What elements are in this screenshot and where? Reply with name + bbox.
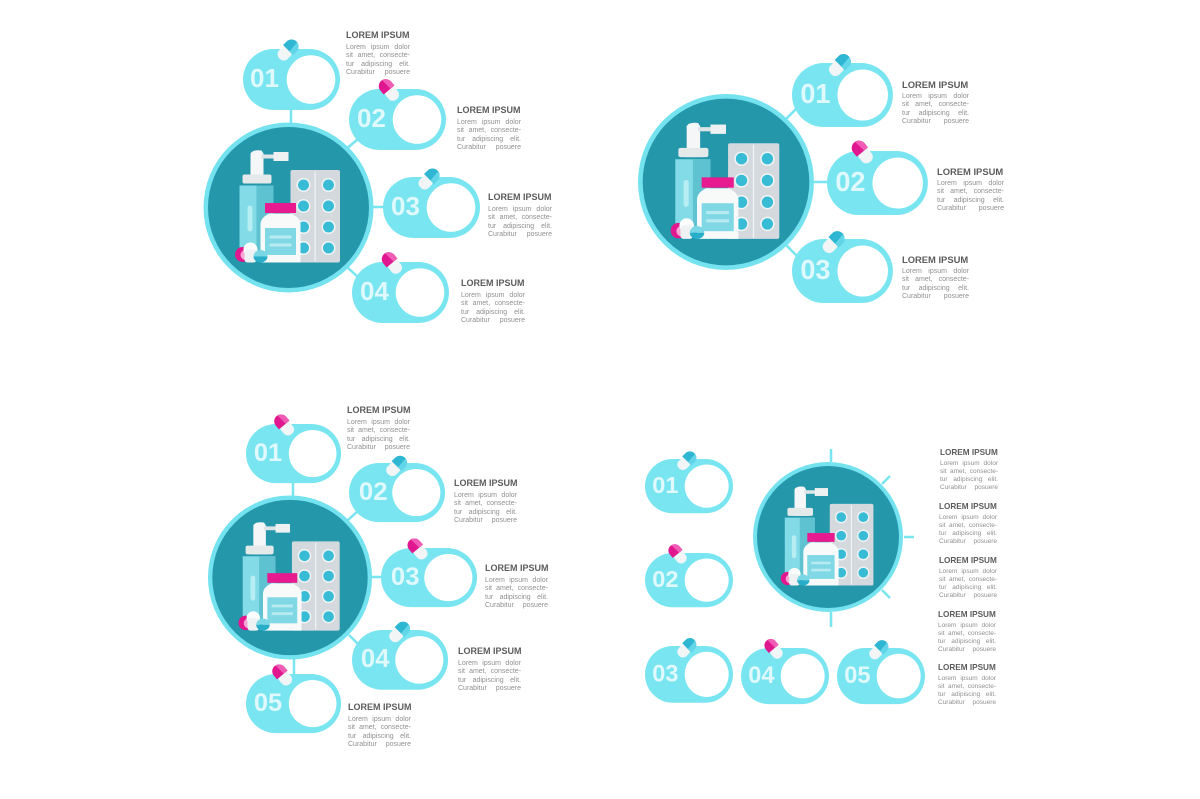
- step 02, infographic 4: 02: [652, 566, 678, 592]
- text block: infographic 4, step 4: Lorem ipsum dolor: [938, 622, 996, 629]
- text block: infographic 2, step 3: LOREM IPSUM: [902, 254, 968, 265]
- text block: infographic 3, step 5: LOREM IPSUM: [348, 702, 412, 712]
- text block: infographic 1, step 4: Curabitur posuere: [461, 317, 525, 324]
- text block: infographic 3, step 4: tur adipiscing elit.: [458, 677, 521, 684]
- text block: infographic 1, step 2: Curabitur posuere: [457, 144, 521, 151]
- text block: infographic 1, step 3: LOREM IPSUM: [488, 192, 552, 202]
- icon: medicine group, infographic 4: [753, 462, 903, 612]
- step 01, infographic 3: [246, 412, 341, 483]
- text block: infographic 3, step 3: tur adipiscing elit.: [485, 594, 548, 601]
- text block: infographic 3, step 4: Lorem ipsum dolor: [458, 660, 521, 667]
- text block: infographic 3, step 1: LOREM IPSUM: [347, 405, 411, 415]
- step 03, infographic 4: 03: [652, 660, 678, 687]
- text block: infographic 2, step 2: [937, 166, 1004, 212]
- text block: infographic 4, step 5: sit amet, consecte-: [938, 683, 996, 690]
- text block: infographic 4, step 5: tur adipiscing elit.: [938, 691, 996, 698]
- text block: infographic 3, step 1: sit amet, consecte-: [347, 427, 410, 434]
- text block: infographic 1, step 4: LOREM IPSUM: [461, 278, 525, 288]
- text block: infographic 4, step 2: tur adipiscing elit.: [939, 530, 997, 537]
- step 01, infographic 2: 01: [800, 78, 830, 109]
- text block: infographic 3, step 5: Curabitur posuere: [348, 741, 411, 748]
- text block: infographic 4, step 1: tur adipiscing elit.: [940, 476, 998, 483]
- text block: infographic 4, step 3: Lorem ipsum dolor: [939, 568, 997, 575]
- text block: infographic 4, step 2: [939, 502, 997, 545]
- step 03, infographic 3: 03: [391, 563, 420, 591]
- step 01, infographic 1: [243, 37, 340, 110]
- text block: infographic 3, step 1: [347, 405, 411, 451]
- text block: infographic 2, step 3: Lorem ipsum dolor: [902, 268, 969, 275]
- text block: infographic 4, step 2: sit amet, consecte-: [939, 522, 997, 529]
- text block: infographic 2, step 2: LOREM IPSUM: [937, 166, 1003, 177]
- step 03, infographic 3: [381, 536, 477, 607]
- text block: infographic 2, step 3: sit amet, consecte-: [902, 276, 969, 283]
- text block: infographic 4, step 5: Lorem ipsum dolor: [938, 675, 996, 682]
- text block: infographic 1, step 3: Lorem ipsum dolor: [488, 206, 552, 213]
- text block: infographic 1, step 4: Lorem ipsum dolor: [461, 292, 525, 299]
- step 02, infographic 3: 02: [359, 478, 388, 506]
- connectors: infographic 2: [785, 107, 829, 257]
- text block: infographic 2, step 1: LOREM IPSUM: [902, 79, 968, 90]
- text block: infographic 4, step 4: tur adipiscing elit.: [938, 638, 996, 645]
- text block: infographic 4, step 1: LOREM IPSUM: [940, 448, 998, 457]
- text block: infographic 1, step 1: sit amet, consecte-: [346, 52, 410, 59]
- text block: infographic 2, step 3: Curabitur posuere: [902, 293, 969, 300]
- text block: infographic 3, step 3: Lorem ipsum dolor: [485, 577, 548, 584]
- text block: infographic 2, step 2: tur adipiscing elit.: [937, 197, 1004, 204]
- text block: infographic 4, step 1: [940, 448, 998, 491]
- step 05, infographic 3: 05: [254, 689, 282, 717]
- text block: infographic 3, step 2: Lorem ipsum dolor: [454, 492, 517, 499]
- step 02, infographic 3: [349, 453, 445, 522]
- step 02, infographic 2: 02: [835, 166, 865, 197]
- step 05, infographic 4: [837, 637, 925, 704]
- text block: infographic 4, step 1: Curabitur posuere: [940, 484, 998, 491]
- text block: infographic 3, step 5: Lorem ipsum dolor: [348, 716, 411, 723]
- text block: infographic 1, step 2: LOREM IPSUM: [457, 105, 521, 115]
- step 02, infographic 1: [349, 76, 446, 150]
- text block: infographic 1, step 2: [457, 105, 521, 151]
- text block: infographic 4, step 2: Curabitur posuere: [939, 538, 997, 545]
- text block: infographic 3, step 2: [454, 478, 518, 524]
- text block: infographic 3, step 4: sit amet, consecte-: [458, 668, 521, 675]
- step 03, infographic 2: [792, 228, 893, 303]
- text block: infographic 2, step 1: Curabitur posuere: [902, 118, 969, 125]
- text block: infographic 3, step 2: tur adipiscing elit.: [454, 509, 517, 516]
- text block: infographic 2, step 1: tur adipiscing elit.: [902, 110, 969, 117]
- text block: infographic 2, step 1: sit amet, consecte-: [902, 101, 969, 108]
- step 05, infographic 4: 05: [844, 662, 870, 689]
- text block: infographic 1, step 1: Curabitur posuere: [346, 69, 410, 76]
- text block: infographic 3, step 5: tur adipiscing elit.: [348, 733, 411, 740]
- text block: infographic 3, step 1: Lorem ipsum dolor: [347, 419, 410, 426]
- text block: infographic 4, step 3: Curabitur posuere: [939, 592, 997, 599]
- text block: infographic 4, step 1: Lorem ipsum dolor: [940, 460, 998, 467]
- text block: infographic 2, step 2: sit amet, consecte-: [937, 188, 1004, 195]
- text block: infographic 3, step 5: sit amet, consecte-: [348, 724, 411, 731]
- step 01, infographic 4: 01: [652, 472, 678, 498]
- text block: infographic 1, step 3: [488, 192, 552, 238]
- text block: infographic 3, step 3: [485, 563, 549, 609]
- text block: infographic 1, step 4: tur adipiscing elit.: [461, 309, 525, 316]
- step 03, infographic 1: [383, 166, 480, 238]
- step 04, infographic 1: 04: [360, 276, 389, 306]
- step 03, infographic 1: 03: [391, 191, 420, 221]
- text block: infographic 3, step 4: Curabitur posuere: [458, 685, 521, 692]
- step 02, infographic 4: [645, 542, 733, 607]
- text block: infographic 4, step 5: LOREM IPSUM: [938, 663, 996, 672]
- text block: infographic 4, step 4: sit amet, consecte-: [938, 630, 996, 637]
- step 04, infographic 1: [352, 249, 449, 323]
- text block: infographic 4, step 3: LOREM IPSUM: [939, 556, 997, 565]
- text block: infographic 1, step 1: Lorem ipsum dolor: [346, 44, 410, 51]
- text block: infographic 2, step 2: Lorem ipsum dolor: [937, 180, 1004, 187]
- text block: infographic 2, step 2: Curabitur posuere: [937, 205, 1004, 212]
- text block: infographic 4, step 5: Curabitur posuere: [938, 699, 996, 706]
- icon: medicine group, infographic 3: [208, 495, 372, 660]
- connectors: infographic 3: [293, 482, 384, 675]
- icon: medicine group, infographic 1: [204, 122, 374, 292]
- text block: infographic 3, step 2: LOREM IPSUM: [454, 478, 518, 488]
- text block: infographic 4, step 2: LOREM IPSUM: [939, 502, 997, 511]
- text block: infographic 2, step 3: tur adipiscing elit.: [902, 285, 969, 292]
- text block: infographic 1, step 2: sit amet, consecte-: [457, 127, 521, 134]
- step 01, infographic 3: 01: [254, 439, 282, 467]
- step 04, infographic 3: [352, 619, 448, 690]
- step 01, infographic 2: [792, 51, 893, 127]
- text block: infographic 4, step 5: [938, 663, 996, 706]
- text block: infographic 2, step 3: [902, 254, 969, 300]
- text block: infographic 1, step 2: Lorem ipsum dolor: [457, 119, 521, 126]
- text block: infographic 1, step 1: LOREM IPSUM: [346, 30, 410, 40]
- step 04, infographic 4: 04: [748, 662, 775, 689]
- text block: infographic 3, step 3: Curabitur posuere: [485, 602, 548, 609]
- text block: infographic 4, step 1: sit amet, consecte-: [940, 468, 998, 475]
- text block: infographic 1, step 3: Curabitur posuere: [488, 231, 552, 238]
- icon: medicine group, infographic 2: [638, 94, 814, 270]
- text block: infographic 3, step 3: LOREM IPSUM: [485, 563, 549, 573]
- text block: infographic 4, step 4: LOREM IPSUM: [938, 610, 996, 619]
- text block: infographic 3, step 4: LOREM IPSUM: [458, 646, 522, 656]
- text block: infographic 4, step 3: tur adipiscing elit.: [939, 584, 997, 591]
- step 02, infographic 1: 02: [357, 103, 386, 133]
- text block: infographic 4, step 3: [939, 556, 997, 599]
- step 02, infographic 2: [827, 138, 928, 215]
- text block: infographic 4, step 3: sit amet, consecte-: [939, 576, 997, 583]
- text block: infographic 3, step 1: Curabitur posuere: [347, 444, 410, 451]
- step 04, infographic 3: 04: [361, 645, 390, 673]
- step 03, infographic 4: [645, 635, 733, 703]
- text block: infographic 2, step 1: Lorem ipsum dolor: [902, 93, 969, 100]
- text block: infographic 3, step 5: [348, 702, 412, 748]
- step 01, infographic 4: [645, 449, 733, 513]
- text block: infographic 3, step 3: sit amet, consecte-: [485, 585, 548, 592]
- text block: infographic 1, step 2: tur adipiscing elit.: [457, 136, 521, 143]
- step 05, infographic 3: [246, 662, 341, 733]
- text block: infographic 2, step 1: [902, 79, 969, 125]
- spokes: infographic 4: [831, 449, 914, 627]
- text block: infographic 1, step 1: tur adipiscing elit.: [346, 61, 410, 68]
- text block: infographic 4, step 4: Curabitur posuere: [938, 646, 996, 653]
- text block: infographic 3, step 2: sit amet, consecte-: [454, 500, 517, 507]
- step 04, infographic 4: [741, 636, 829, 704]
- text block: infographic 1, step 3: sit amet, consecte-: [488, 214, 552, 221]
- text block: infographic 4, step 2: Lorem ipsum dolor: [939, 514, 997, 521]
- step 03, infographic 2: 03: [800, 254, 830, 285]
- text block: infographic 3, step 1: tur adipiscing elit.: [347, 436, 410, 443]
- text block: infographic 1, step 3: tur adipiscing elit.: [488, 223, 552, 230]
- step 01, infographic 1: 01: [250, 63, 279, 93]
- text block: infographic 4, step 4: [938, 610, 996, 653]
- text block: infographic 1, step 4: [461, 278, 525, 324]
- text block: infographic 1, step 4: sit amet, consecte-: [461, 300, 525, 307]
- text block: infographic 3, step 4: [458, 646, 522, 692]
- connectors: infographic 1: [291, 109, 385, 277]
- text block: infographic 3, step 2: Curabitur posuere: [454, 517, 517, 524]
- text block: infographic 1, step 1: [346, 30, 410, 76]
